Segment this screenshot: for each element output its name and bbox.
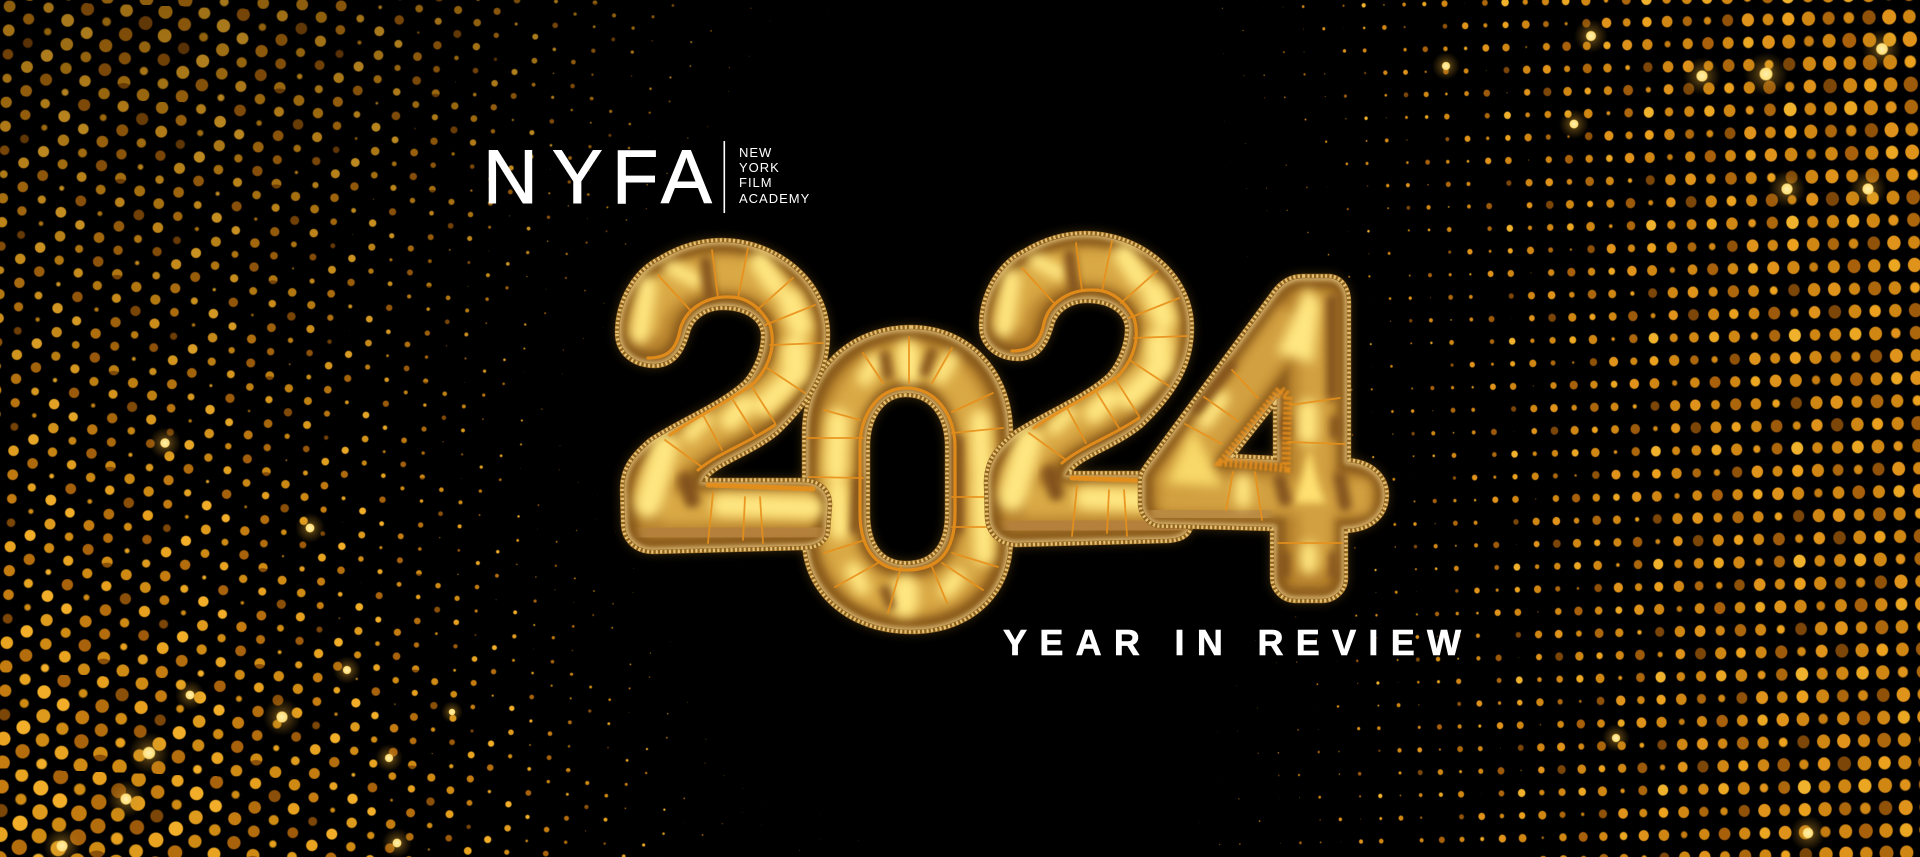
- golden halftone dots: left field: [0, 0, 880, 857]
- darkening over the upper left dots: [0, 0, 700, 520]
- gold foil balloons: 2024: [617, 233, 1387, 632]
- golden halftone dots: right field: [1198, 0, 1920, 857]
- NYFA logo: [483, 135, 810, 220]
- logo divider: [724, 141, 725, 213]
- logo school name: FILM: [739, 175, 773, 190]
- logo school name: [739, 145, 810, 206]
- logo school name: YORK: [739, 160, 780, 175]
- balloon glow: [617, 233, 1387, 632]
- balloon: first two: [617, 240, 830, 552]
- balloon: second two: [981, 233, 1194, 545]
- tagline: YEAR IN REVIEW: [1003, 622, 1461, 663]
- logo wordmark: NYFA: [483, 135, 712, 220]
- logo school name: NEW: [739, 145, 772, 160]
- balloon: zero: [804, 327, 1011, 632]
- balloon: four: [1140, 276, 1387, 601]
- logo school name: ACADEMY: [739, 191, 810, 206]
